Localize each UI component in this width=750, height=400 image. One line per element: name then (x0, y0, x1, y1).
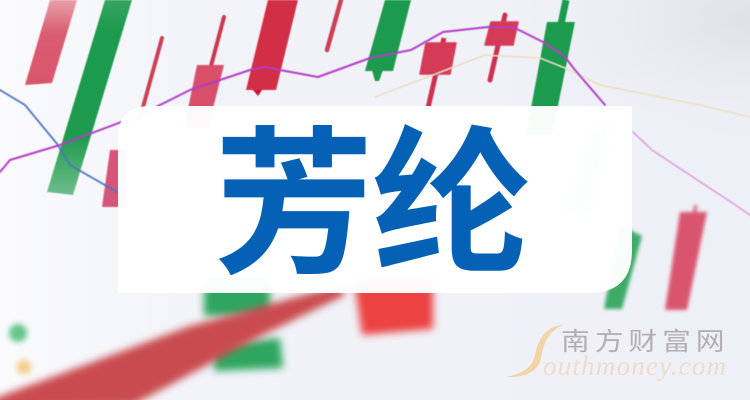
red candle 5 (485, 15, 518, 80)
title text: 芳纶 (214, 116, 532, 295)
red candle 1 (25, 0, 77, 85)
red candle 7 (665, 205, 707, 310)
ghost green candle (565, 120, 612, 215)
watermark chinese name: 南方财富网 (561, 328, 729, 356)
blurred red band (0, 285, 345, 400)
red candle 6 (102, 150, 125, 207)
magenta line (0, 27, 605, 172)
title panel (118, 106, 632, 293)
red wick 1 (140, 38, 162, 118)
watermark swoosh (506, 325, 563, 377)
red wick 2 (327, 0, 341, 50)
blurred red block (354, 280, 433, 335)
green candle 1 (47, 0, 132, 195)
blurred orange dot (16, 360, 32, 374)
blurred green block (204, 280, 283, 371)
watermark url: outhmoney.com (543, 351, 727, 381)
watermark (506, 325, 729, 381)
yellow line (375, 55, 750, 117)
green candle 2 (365, 0, 411, 81)
red candle 2 (184, 17, 224, 128)
green candle 4 (604, 225, 642, 309)
green candle 3 (526, 0, 575, 135)
red candle 3 (246, 0, 298, 96)
candlestick chart (25, 0, 575, 207)
blue line (0, 90, 117, 192)
faded magenta line (633, 132, 750, 215)
blurred foreground candles (0, 280, 433, 400)
red candle 4 (420, 38, 456, 108)
moving average lines (0, 27, 750, 215)
blurred green dot (9, 324, 27, 342)
